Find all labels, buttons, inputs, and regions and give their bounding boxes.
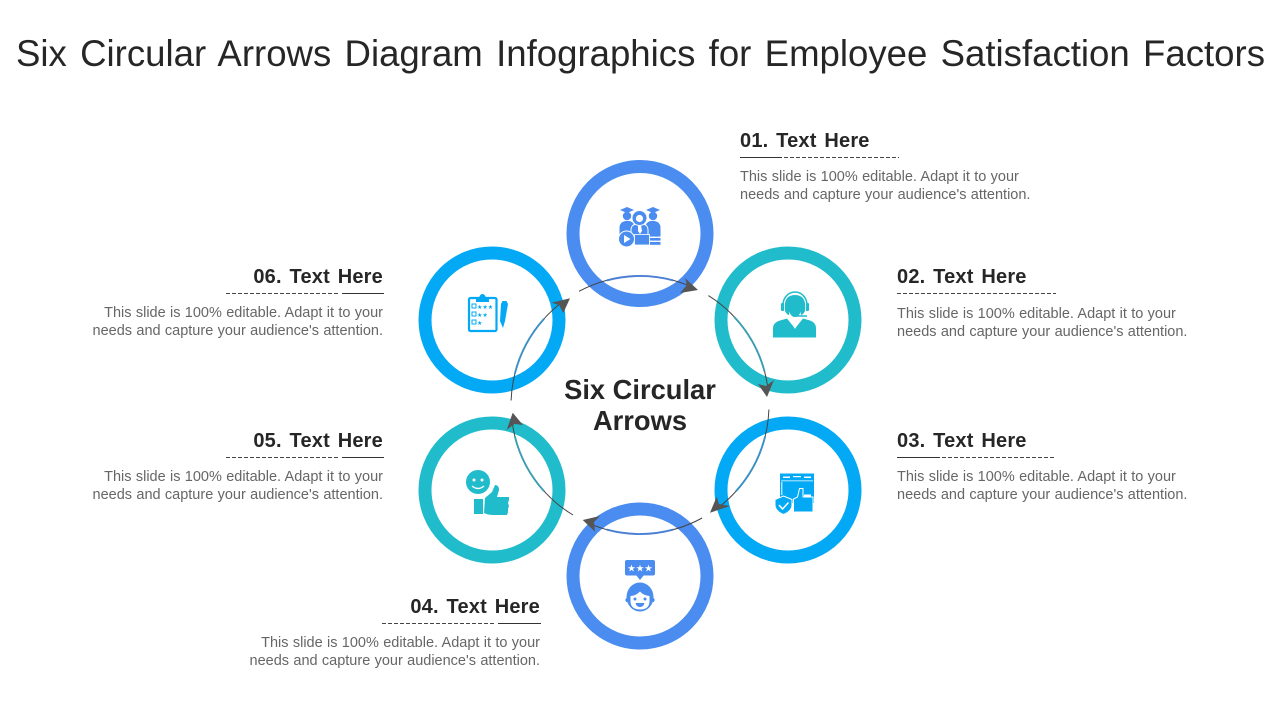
icon: checklist clipboard and pencil [469,294,508,331]
centre label: Six Circular [564,374,716,405]
text block 04 [250,596,541,669]
icon: face with rating bubble: ★★★ [627,564,653,574]
circle 2 [721,253,855,387]
icon: box, shield and thumb [775,474,814,514]
circle 1 [573,166,707,300]
text block 04: This slide is 100% editable. Adapt it to your [261,635,540,651]
arrow 2 [708,296,774,397]
text block 05: needs and capture your audience's attention. [93,487,383,503]
centre label: Arrows [593,405,687,436]
circle 6 [425,253,559,387]
title: Six Circular Arrows Diagram Infographics for Employee Satisfaction Factors [16,33,1265,74]
arrow 1 [579,276,698,293]
text block 02: 02. Text Here [897,266,1027,288]
icon: checklist clipboard and pencil: ★★★ [477,304,493,311]
arrow 5 [507,413,573,515]
text block 06: 06. Text Here [253,266,383,288]
text block 02: This slide is 100% editable. Adapt it to your [897,306,1176,322]
text block 02: needs and capture your audience's attention. [897,324,1187,340]
icon: team with caps [618,207,660,247]
circle 3 [721,423,855,557]
text block 05: This slide is 100% editable. Adapt it to your [104,469,383,485]
text block 05: 05. Text Here [253,430,383,452]
text block 05 [93,430,384,503]
text block 01 [740,130,1030,203]
text block 04: 04. Text Here [410,596,540,618]
text block 03: needs and capture your audience's attention. [897,487,1187,503]
text block 03: 03. Text Here [897,430,1027,452]
icon: face with rating bubble [625,560,655,612]
arrow 4 [583,516,702,534]
icon: checklist clipboard and pencil: ★★ [477,312,488,319]
text block 06: needs and capture your audience's attention. [93,323,383,339]
text block 01: This slide is 100% editable. Adapt it to your [740,169,1019,185]
text block 03: This slide is 100% editable. Adapt it to your [897,469,1176,485]
circle 5 [425,423,559,557]
icon: headset agent [773,292,816,338]
icon: smiley and thumbs up [466,470,509,515]
text block 06: This slide is 100% editable. Adapt it to your [104,305,383,321]
icon: checklist clipboard and pencil: ★ [477,320,482,327]
circle 4 [573,509,707,643]
arrow 3 [710,410,769,513]
text block 01: 01. Text Here [740,130,870,152]
text block 02 [897,266,1187,340]
text block 03 [897,430,1187,503]
arrow 6 [511,298,570,400]
text block 04: needs and capture your audience's attention. [250,653,540,669]
text block 06 [93,266,384,339]
text block 01: needs and capture your audience's attention. [740,187,1030,203]
